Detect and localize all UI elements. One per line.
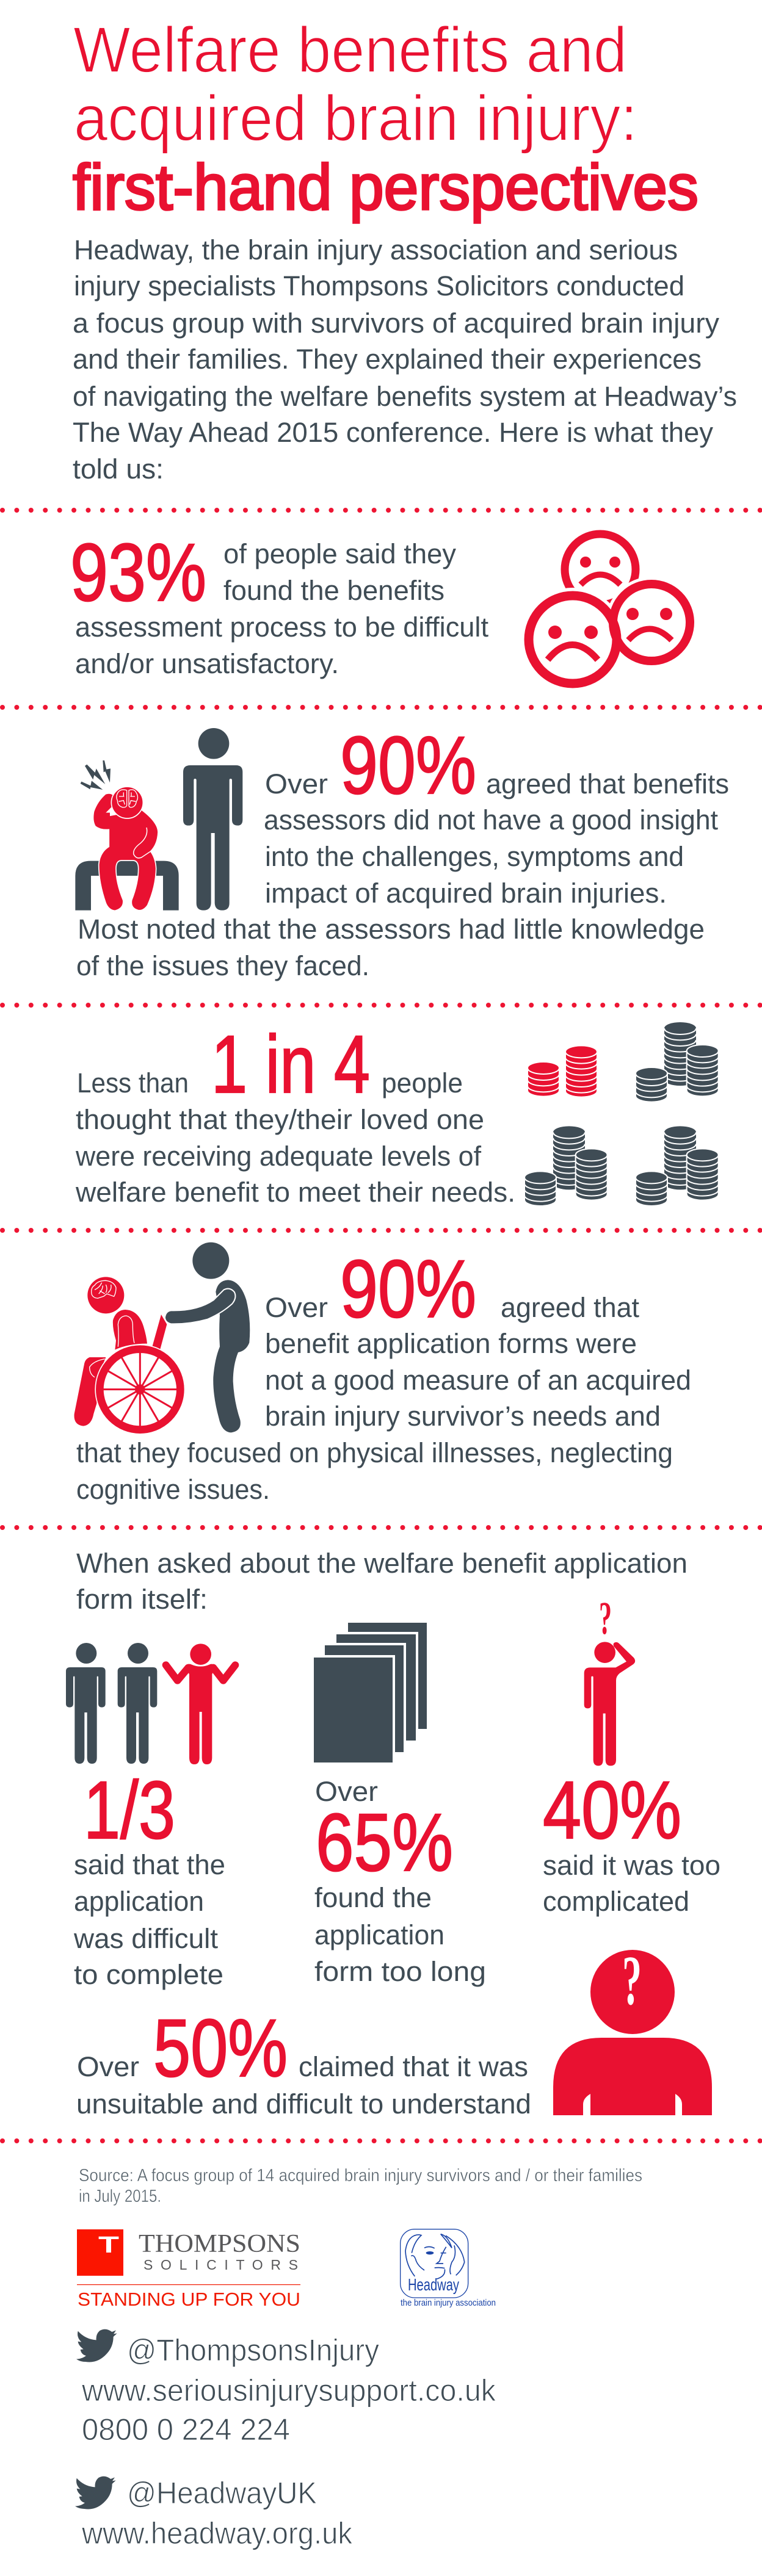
text block: 90 percent insight: of the issues they faced. xyxy=(76,950,369,981)
stat: 50%: 50% xyxy=(153,2003,288,2094)
text block: 50 percent xyxy=(76,2003,531,2120)
text block: one third: said that the xyxy=(74,1849,225,1880)
text block: 90 percent insight: assessors did not have a good insight xyxy=(264,804,718,835)
text block: 40 percent: said it was too xyxy=(543,1850,720,1881)
contact: Thompsons xyxy=(76,2329,496,2447)
panel: application forms xyxy=(74,1243,691,1505)
contact: Thompsons: @ThompsonsInjury xyxy=(127,2333,379,2367)
text block: 90 percent forms: that they focused on physical illnesses, neglecting xyxy=(76,1437,673,1468)
logo: Thompsons Solicitors: THOMPSONS xyxy=(139,2230,300,2258)
intro text: and their families. They explained their experiences xyxy=(73,344,702,375)
text block: 93 percent description: assessment process to be difficult xyxy=(75,612,488,643)
text block: 90 percent forms: agreed that xyxy=(501,1292,639,1323)
contact: Headway xyxy=(75,2476,353,2550)
text block: 65 percent: found the xyxy=(314,1882,432,1913)
text block: one third: was difficult xyxy=(73,1923,218,1954)
icon: person scratching head with question mark: ? xyxy=(599,1593,612,1644)
text block: 65 percent: Over xyxy=(315,1776,378,1807)
logo: Thompsons Solicitors xyxy=(77,2229,300,2310)
icon: person scratching head with question mark xyxy=(584,1593,635,1766)
text block: 90 percent insight: into the challenges, symptoms and xyxy=(265,841,684,872)
contact: Headway: www.headway.org.uk xyxy=(81,2516,353,2550)
heading: When asked about the welfare benefit application xyxy=(76,1548,688,1579)
text block: 1 in 4 people: people xyxy=(382,1067,463,1099)
title: acquired brain injury: xyxy=(74,82,637,154)
intro text: a focus group with survivors of acquired brain injury xyxy=(73,308,720,339)
text block: 93 percent description: and/or unsatisfactory. xyxy=(75,648,339,679)
intro text: The Way Ahead 2015 conference. Here is what they xyxy=(73,417,714,448)
text block: 90 percent forms: Over xyxy=(265,1292,328,1323)
source note: Source: A focus group of 14 acquired brain injury survivors and / or their families xyxy=(79,2166,642,2185)
icon: person with question mark in head: ? xyxy=(622,1942,642,2019)
icon: twitter bird xyxy=(76,2329,117,2362)
text block: one third: to complete xyxy=(74,1959,223,1990)
text block: 90 percent insight: Over xyxy=(265,768,328,799)
text block: 50 percent: Over xyxy=(77,2051,139,2082)
icon: three sad faces xyxy=(521,534,697,691)
panel: assessors insight xyxy=(75,720,729,981)
panel: application form itself xyxy=(66,1548,720,2120)
text block: one third xyxy=(73,1765,225,1990)
text block: 90 percent insight xyxy=(76,720,729,981)
logo: Headway xyxy=(401,2229,496,2308)
intro text: told us: xyxy=(73,453,164,485)
text block: 90 percent forms: brain injury survivor’s needs and xyxy=(265,1401,661,1432)
text block: 1 in 4 people: welfare benefit to meet their needs. xyxy=(75,1177,515,1208)
panel: 1 in 4 xyxy=(75,1019,719,1208)
text block: 65 percent: application xyxy=(314,1919,445,1950)
icon: three people, one shrugging xyxy=(66,1643,235,1764)
intro text: injury specialists Thompsons Solicitors conducted xyxy=(74,270,684,301)
text block: 90 percent forms: not a good measure of an acquired xyxy=(265,1365,691,1396)
stat: 1/3: 1/3 xyxy=(84,1765,175,1856)
text block: 93 percent description: found the benefits xyxy=(223,575,445,606)
heading: form itself: xyxy=(76,1584,208,1615)
stat: 90%: 90% xyxy=(340,720,476,811)
logo: Thompsons Solicitors: T xyxy=(98,2232,119,2258)
stat: 90%: 90% xyxy=(340,1244,476,1335)
logo: Headway: Headway xyxy=(408,2275,459,2294)
logo: Thompsons Solicitors: SOLICITORS xyxy=(143,2257,298,2273)
text block: one third: application xyxy=(74,1886,204,1917)
contact: Thompsons: 0800 0 224 224 xyxy=(82,2412,290,2447)
source note xyxy=(79,2166,642,2206)
panel: 93 percent xyxy=(70,527,697,691)
icon: twitter bird xyxy=(75,2477,116,2509)
intro text: of navigating the welfare benefits system at Headway’s xyxy=(73,381,737,412)
text block: 90 percent forms: benefit application forms were xyxy=(265,1328,637,1359)
text block: 1 in 4 people xyxy=(75,1019,515,1208)
text block: 50 percent: claimed that it was xyxy=(299,2051,528,2082)
title: Welfare benefits and xyxy=(73,14,627,86)
icon: carer pushing wheelchair xyxy=(74,1243,250,1435)
text block: 90 percent forms: cognitive issues. xyxy=(76,1474,270,1505)
text block: 50 percent: unsuitable and difficult to understand xyxy=(76,2088,531,2120)
title xyxy=(73,14,699,223)
text block: 90 percent insight: Most noted that the assessors had little knowledge xyxy=(78,914,705,945)
intro text xyxy=(73,234,737,485)
title: first-hand perspectives xyxy=(73,151,699,223)
source note: in July 2015. xyxy=(79,2187,161,2206)
text block: 1 in 4 people: Less than xyxy=(77,1067,189,1099)
text block: 90 percent forms xyxy=(76,1244,691,1505)
contact: Thompsons: www.seriousinjurysupport.co.uk xyxy=(81,2373,496,2408)
text block: 65 percent: form too long xyxy=(314,1956,486,1987)
logo: Headway: the brain injury association xyxy=(401,2298,496,2308)
text block: 65 percent xyxy=(314,1776,486,1987)
text block: 40 percent xyxy=(543,1765,720,1917)
text block: 90 percent insight: impact of acquired brain injuries. xyxy=(265,878,667,909)
heading xyxy=(76,1548,688,1615)
text block: 40 percent: complicated xyxy=(543,1886,689,1917)
icon: seated person with headache and standing assessor xyxy=(75,728,242,911)
logo: Thompsons Solicitors: STANDING UP FOR YOU xyxy=(78,2289,300,2310)
stat: 40%: 40% xyxy=(543,1765,681,1856)
stat: 1 in 4: 1 in 4 xyxy=(211,1019,370,1110)
text block: 1 in 4 people: thought that they/their loved one xyxy=(76,1104,484,1135)
text block: 1 in 4 people: were receiving adequate levels of xyxy=(75,1141,481,1172)
stat: 93%: 93% xyxy=(70,527,206,618)
text block: 93 percent description: of people said they xyxy=(223,538,456,569)
icon: person with question mark in head xyxy=(553,1942,712,2115)
icon: stack of paper xyxy=(313,1623,427,1764)
text block: 90 percent insight: agreed that benefits xyxy=(486,768,729,799)
contact: Headway: @HeadwayUK xyxy=(127,2476,317,2510)
text block: 93 percent description xyxy=(75,538,488,679)
intro text: Headway, the brain injury association and serious xyxy=(74,234,678,265)
icon: coin stacks xyxy=(524,1022,719,1206)
stat: 65%: 65% xyxy=(316,1797,453,1888)
